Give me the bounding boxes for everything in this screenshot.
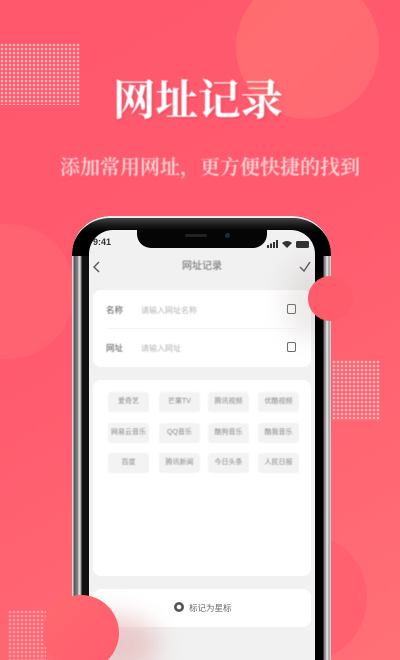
tag 7: 酷狗音乐: [214, 429, 242, 436]
soft shade near bottom circle: [69, 615, 159, 660]
tag 4: 优酷视频: [264, 398, 292, 405]
tag 1: [108, 392, 149, 412]
dot pattern: right: [332, 360, 380, 421]
placeholder: name: 请输入网址名称: [141, 306, 197, 315]
screen: [89, 230, 315, 660]
tag 12: 人民日报: [264, 459, 292, 466]
background circle: left behind phone: [0, 224, 75, 359]
title: 网址记录: [113, 78, 283, 125]
tag 3: 腾讯视频: [214, 398, 242, 405]
tag 6: QQ音乐: [167, 429, 192, 436]
tag 4: [258, 392, 299, 412]
camera: [225, 233, 230, 238]
tag 5: [108, 423, 149, 443]
divider: [107, 328, 297, 329]
tag 10: 腾讯新闻: [166, 459, 194, 466]
tag 11: 今日头条: [214, 459, 242, 466]
right rim: [316, 242, 331, 660]
soft shade near top circle: [284, 260, 334, 340]
accent circle: upper right: [308, 276, 353, 321]
tag 9: 百度: [122, 459, 136, 466]
star card: [93, 589, 311, 627]
back arrow: [93, 262, 100, 272]
tag 8: 酷我音乐: [264, 429, 292, 436]
tag 2: [159, 392, 200, 412]
icon: copy name: [287, 304, 296, 314]
tag 5: 网易云音乐: [111, 429, 146, 436]
status icons: [267, 240, 309, 248]
tag 7: [208, 423, 249, 443]
form card: [93, 290, 311, 367]
tags card: [93, 380, 311, 576]
background circle: lower right: [250, 535, 367, 660]
tag 12: [258, 453, 299, 473]
icon: copy url: [287, 342, 296, 352]
check mark: [300, 262, 310, 272]
accent circle: bottom left: [43, 595, 119, 660]
background circle: top right: [236, 0, 379, 119]
tag 9: [108, 453, 149, 473]
notch: [137, 230, 267, 248]
tag 3: [208, 392, 249, 412]
tag 1: 爱奇艺: [118, 398, 139, 405]
tag 10: [159, 453, 200, 473]
tag 6: [159, 423, 200, 443]
tag 8: [258, 423, 299, 443]
tag 11: [208, 453, 249, 473]
placeholder: url: 请输入网址: [141, 344, 181, 353]
star button: [174, 602, 232, 613]
status time: 9:41: [93, 237, 111, 247]
dot pattern: bottom left: [8, 610, 46, 660]
speaker: [185, 234, 207, 237]
phone: [72, 216, 331, 660]
top rim: [72, 216, 331, 256]
dot pattern: top left: [0, 44, 80, 105]
screen title: 网址记录: [182, 261, 222, 272]
subtitle: 添加常用网址，更方便快捷的找到: [60, 157, 360, 179]
label: url: 网址: [106, 343, 123, 353]
tag 2: 芒果TV: [168, 398, 191, 405]
label: name: 名称: [106, 305, 123, 315]
star button: 标记为星标: [189, 603, 232, 613]
